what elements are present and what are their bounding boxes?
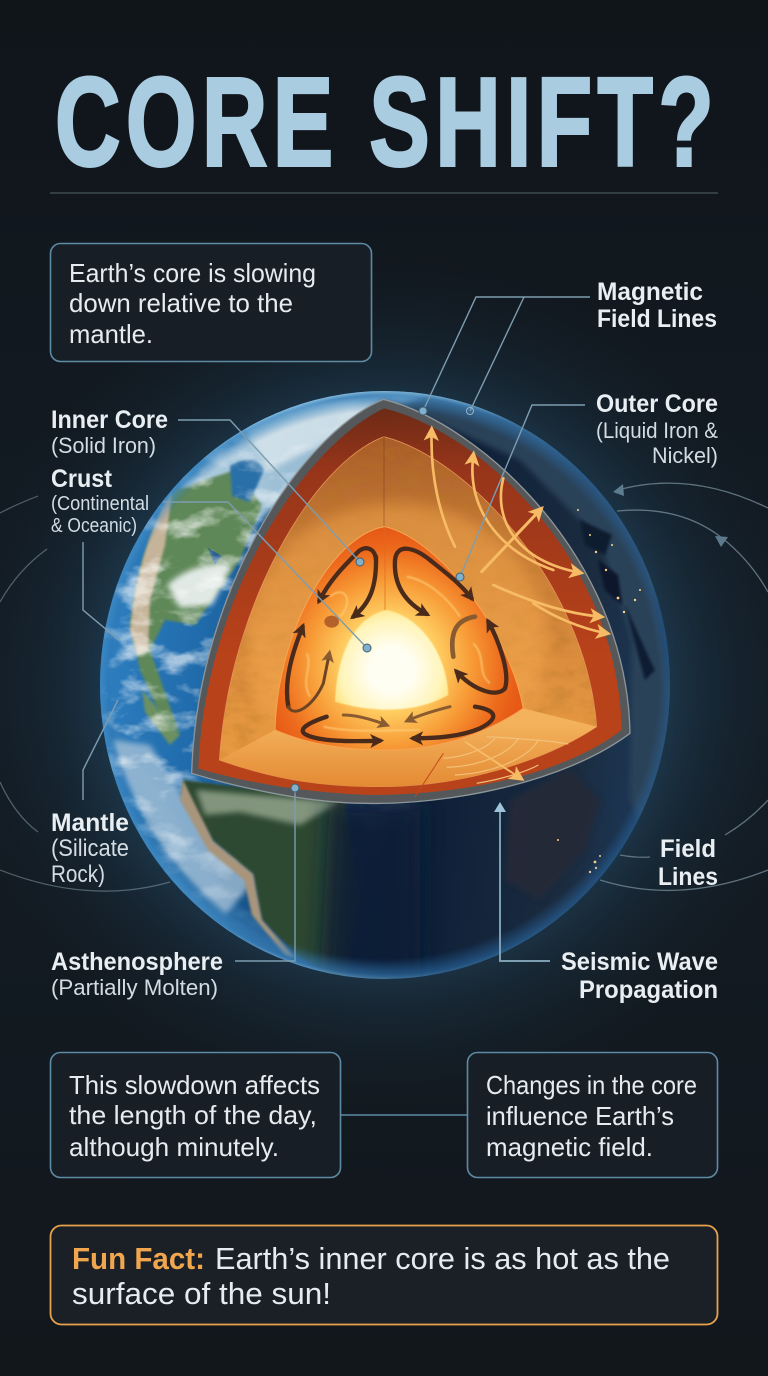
label: asthenosphere <box>51 948 223 1000</box>
label: mantle <box>51 809 129 888</box>
label: seismic wave propagation: Propagation <box>579 976 718 1004</box>
inner core <box>335 610 448 710</box>
callout: length of the day: the length of the day, <box>69 1100 317 1130</box>
label: outer core <box>596 390 718 468</box>
leader dots <box>291 407 474 792</box>
label: magnetic field lines: Field Lines <box>597 305 717 333</box>
label: mantle: Mantle <box>51 809 129 837</box>
seismic waves <box>415 737 568 797</box>
label: outer core: (Liquid Iron & <box>596 418 718 443</box>
core cutaway wedge <box>192 399 630 803</box>
label: field lines: Lines <box>658 863 718 891</box>
field lines: left arcs <box>0 496 170 891</box>
callout: core slowing: Earth’s core is slowing <box>69 258 316 288</box>
callout: fun fact: Fun Fact: <box>72 1241 205 1276</box>
callout: magnetic field influence <box>468 1052 718 1178</box>
label: inner core <box>51 406 168 458</box>
south america <box>181 778 346 970</box>
callout: fun fact: Earth’s inner core is as hot as the <box>215 1241 670 1276</box>
label: field lines <box>658 835 718 891</box>
callout: magnetic field influence: magnetic field. <box>486 1132 653 1162</box>
callout: magnetic field influence: Changes in the core <box>486 1070 697 1100</box>
africa silhouette <box>505 770 600 900</box>
convection arrows <box>287 548 506 741</box>
callout: core slowing <box>50 244 372 362</box>
label: inner core: (Solid Iron) <box>51 433 156 458</box>
slate crescent upper right <box>402 396 668 813</box>
label: outer core: Outer Core <box>596 390 718 418</box>
mantle heat glow <box>246 500 546 720</box>
crust rim <box>192 399 630 803</box>
mantle floor <box>219 708 597 787</box>
callout: length of the day: although minutely. <box>69 1132 279 1162</box>
callout: length of the day: This slowdown affects <box>69 1070 320 1100</box>
arrow: seismic wave head <box>494 802 506 812</box>
label: crust: Crust <box>51 465 113 493</box>
mantle outer band <box>198 408 622 795</box>
label: crust: & Oceanic) <box>51 515 137 537</box>
label: magnetic field lines <box>597 278 717 333</box>
label: crust <box>51 465 149 537</box>
city lights <box>557 509 641 873</box>
label: magnetic field lines: Magnetic <box>597 278 703 306</box>
callout: core slowing: mantle. <box>69 319 153 349</box>
ocean lower <box>170 862 302 961</box>
night land fade <box>320 800 420 990</box>
top cap <box>180 391 553 533</box>
field lines: right arcs <box>600 483 768 890</box>
label: mantle: Rock) <box>51 861 105 888</box>
leader lines <box>83 297 590 961</box>
callout: fun fact <box>50 1226 718 1324</box>
magnetic field arrows <box>431 430 607 633</box>
globe <box>100 390 672 990</box>
callout: core slowing: down relative to the <box>69 288 293 318</box>
label: crust: (Continental <box>51 493 149 515</box>
outer core <box>275 527 523 750</box>
north america <box>130 470 262 735</box>
callout: magnetic field influence: influence Earth’s <box>486 1101 674 1131</box>
label: seismic wave propagation: Seismic Wave <box>561 948 718 976</box>
cloud texture <box>102 432 405 915</box>
ocean clouds <box>112 740 255 915</box>
mantle inner layer <box>219 437 597 787</box>
label: seismic wave propagation <box>561 948 718 1004</box>
label: asthenosphere: (Partially Molten) <box>51 975 218 1000</box>
label: inner core: Inner Core <box>51 406 168 434</box>
label: mantle: (Silicate <box>51 835 129 862</box>
label: outer core: Nickel) <box>652 443 718 468</box>
title: CORE SHIFT? <box>55 53 714 193</box>
callout: fun fact: surface of the sun! <box>72 1276 331 1311</box>
label: asthenosphere: Asthenosphere <box>51 948 223 976</box>
core swirls <box>306 577 490 731</box>
label: field lines: Field <box>660 835 716 863</box>
eurasia dark seas <box>580 520 612 555</box>
callout: length of the day <box>50 1052 340 1178</box>
